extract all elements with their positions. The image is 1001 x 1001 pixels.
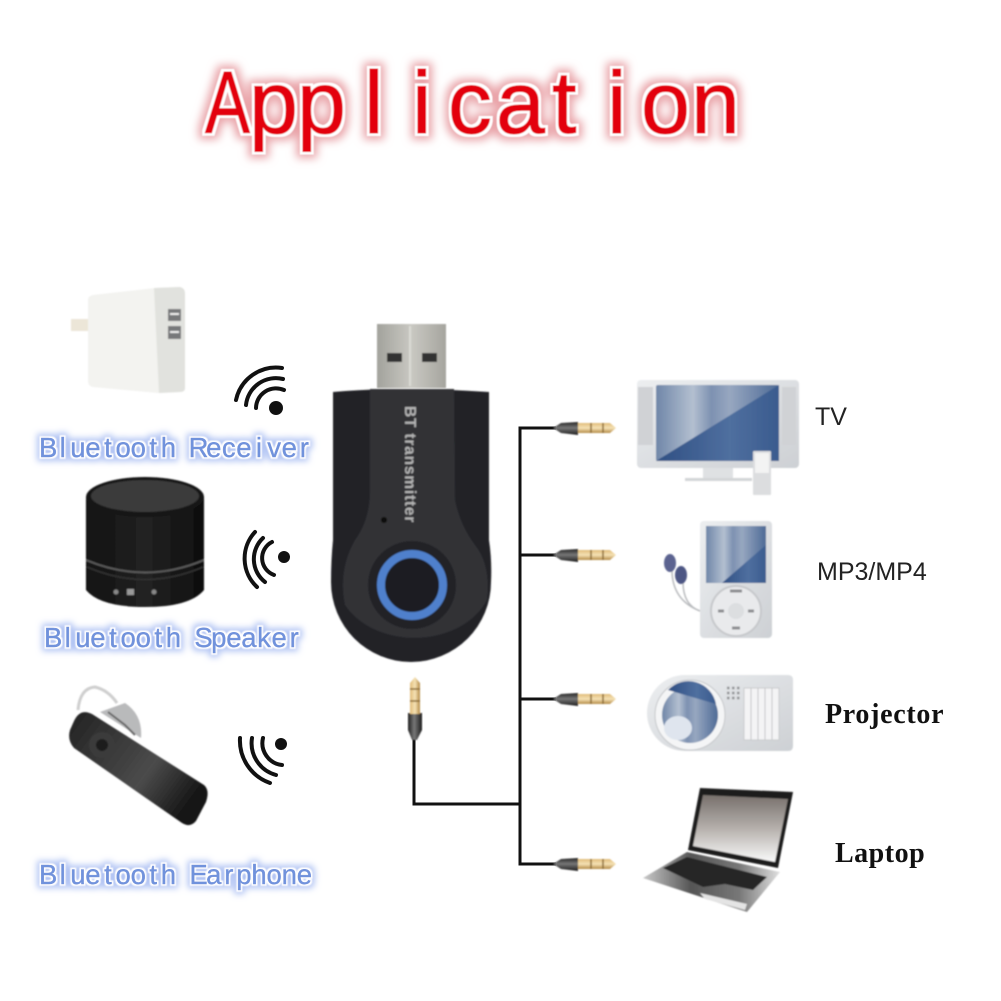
icon: bluetooth earphone [69, 687, 208, 825]
audio jack: Projector [553, 693, 616, 706]
title: pplication [249, 53, 740, 152]
audio cable splitter [414, 428, 556, 864]
usb dongle: BT transmitter [331, 324, 491, 662]
label: TV: TV [815, 403, 847, 431]
usb dongle: BT transmitter: BT transmitter [401, 406, 418, 523]
audio jack: TV [553, 422, 616, 435]
icon: MP3 player with earphones [664, 521, 772, 638]
audio jack: Laptop [553, 858, 616, 871]
icon: wireless signal speaker [245, 532, 290, 587]
icon: wireless signal earphone [240, 738, 287, 783]
label: Bluetooth Receiver: Bluetooth Receiver [39, 432, 309, 463]
label: Bluetooth Speaker: Bluetooth Speaker [44, 622, 299, 653]
icon: projector [647, 675, 793, 751]
icon: wireless signal receiver [236, 368, 284, 415]
icon: laptop [643, 788, 793, 912]
label: Laptop: Laptop [835, 838, 925, 869]
icon: wall charger receiver [71, 287, 185, 393]
icon: TV [637, 380, 799, 495]
audio jack: dongle input [408, 677, 422, 740]
audio jack: MP3/MP4 [553, 549, 616, 562]
title: A [205, 53, 250, 152]
icon: bluetooth speaker [86, 477, 204, 607]
label: MP3/MP4: MP3/MP4 [817, 558, 927, 586]
label: Bluetooth Earphone: Bluetooth Earphone [39, 859, 312, 890]
label: Projector: Projector [825, 699, 944, 730]
